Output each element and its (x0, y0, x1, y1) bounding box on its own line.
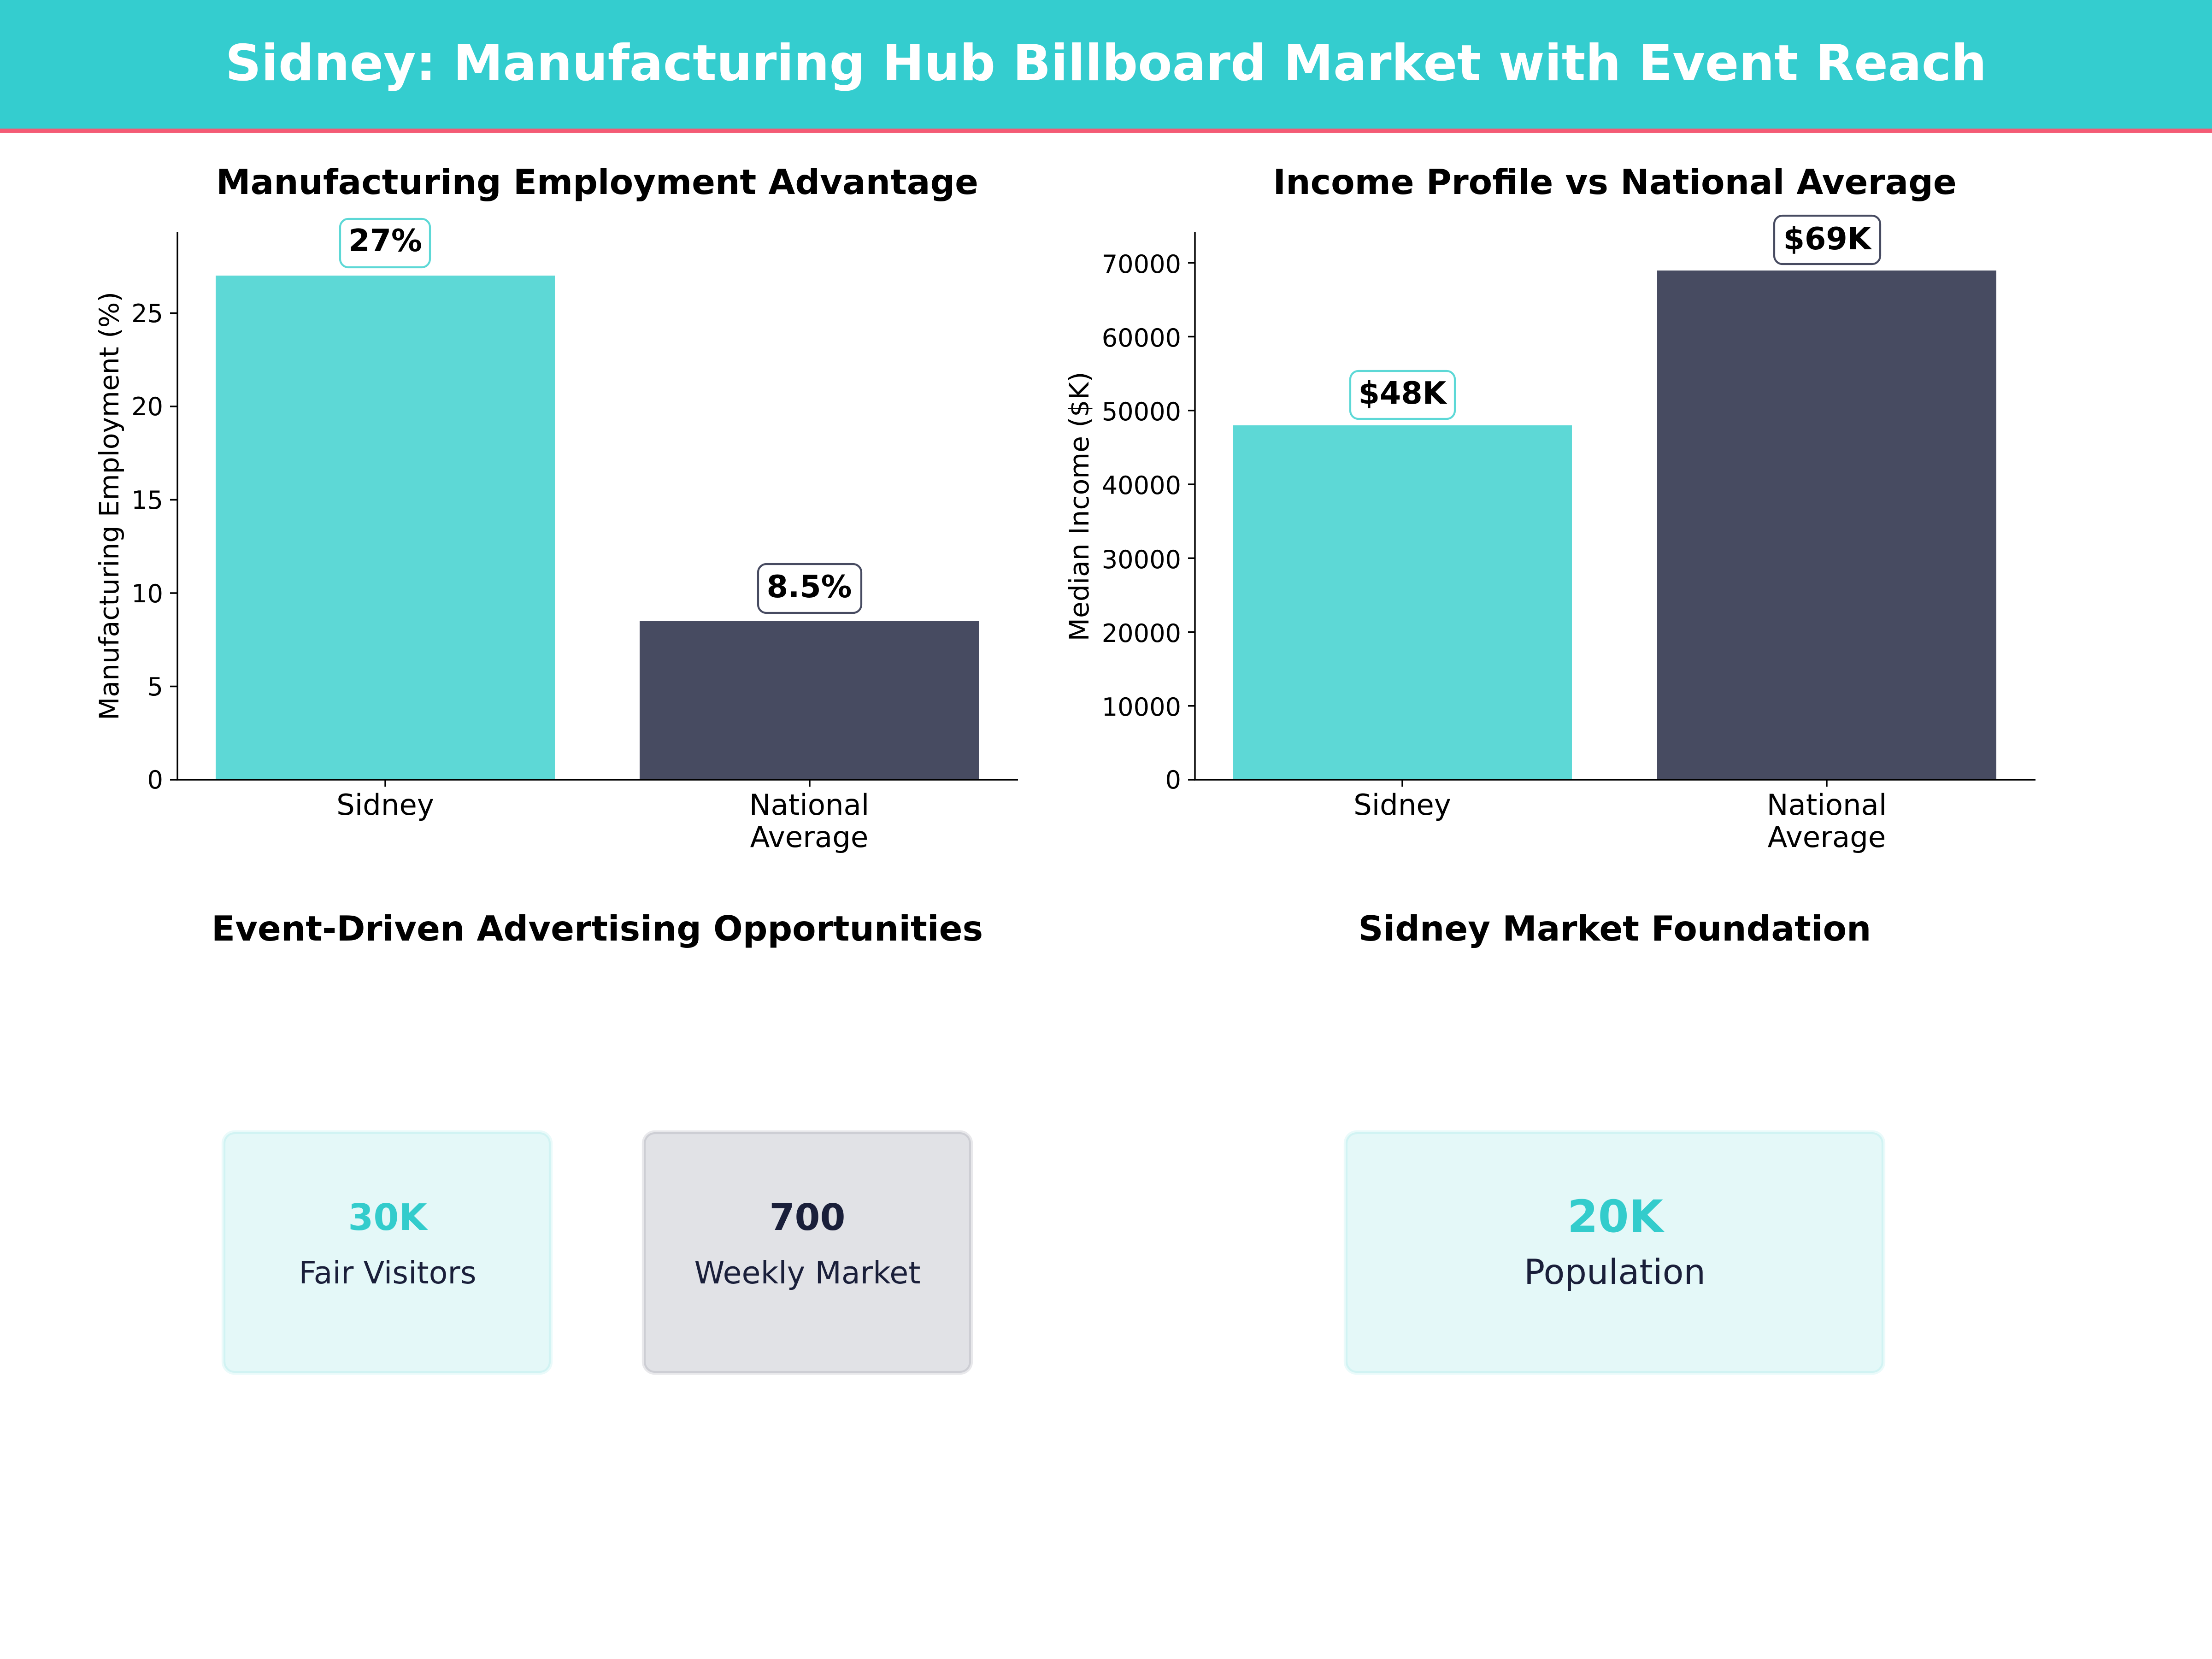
x tick labels: Sidney (1353, 788, 1451, 822)
y tick labels: 0 (1165, 765, 1181, 794)
value label: 8.5% (758, 564, 861, 613)
y tick labels: 20000 (1102, 619, 1181, 648)
y axis label: Median Income ($K) (1064, 372, 1095, 641)
panel: manufacturing employment chart (94, 162, 1018, 854)
axes and ticks (1188, 232, 2036, 787)
bar: National Average 8.5% (640, 621, 979, 780)
x tick labels: National (1767, 788, 1887, 822)
heading: event-driven: Event-Driven Advertising Opportunities (212, 908, 983, 949)
main title: Sidney: Manufacturing Hub Billboard Market with Event Reach (225, 34, 1987, 92)
bar: Sidney $48K (1233, 425, 1572, 780)
card: 30K Fair Visitors: Fair Visitors (299, 1255, 477, 1291)
value label: 8.5%: 8.5% (767, 569, 852, 605)
heading: income profile: Income Profile vs National Average (1273, 162, 1957, 202)
bar: National Average $69K (1657, 271, 1996, 780)
y tick labels: 50000 (1102, 397, 1181, 426)
y tick labels: 0 (147, 765, 163, 794)
value label: 27%: 27% (348, 223, 422, 259)
value label: $69K: $69K (1783, 221, 1872, 257)
x tick labels (1353, 788, 1887, 854)
card: 700 Weekly Market: 700 (770, 1196, 845, 1239)
card: 30K Fair Visitors: 30K (348, 1196, 428, 1239)
x tick labels: Average (750, 820, 868, 854)
card: 20K Population: 20K (1567, 1191, 1665, 1242)
card: 30K Fair Visitors (224, 1132, 551, 1373)
y tick labels: 25 (131, 299, 163, 328)
y tick labels: 10 (131, 579, 163, 608)
panel: event-driven advertising opportunities (212, 908, 983, 1373)
y tick labels: 40000 (1102, 471, 1181, 500)
y tick labels: 5 (147, 672, 163, 701)
y tick labels (1102, 250, 1181, 794)
y tick labels: 15 (131, 486, 163, 515)
y tick labels (131, 299, 163, 794)
axes and ticks (170, 232, 1018, 787)
y tick labels: 70000 (1102, 250, 1181, 279)
header banner (0, 0, 2212, 133)
bar: Sidney 27% (216, 276, 555, 780)
value label: $48K (1350, 371, 1455, 419)
x tick labels: Average (1768, 820, 1886, 854)
heading: manufacturing employment: Manufacturing Employment Advantage (216, 162, 978, 202)
card: 700 Weekly Market: Weekly Market (694, 1255, 920, 1291)
x tick labels: Sidney (336, 788, 434, 822)
x tick labels (336, 788, 869, 854)
card: 20K Population: Population (1524, 1252, 1706, 1292)
y axis label: Manufacturing Employment (%) (94, 292, 125, 720)
heading: market foundation: Sidney Market Foundation (1359, 908, 1871, 949)
card: 700 Weekly Market (644, 1132, 971, 1373)
x tick labels: National (749, 788, 869, 822)
panel: income profile chart (1064, 162, 2036, 854)
y tick labels: 10000 (1102, 693, 1181, 722)
card: 20K Population (1346, 1132, 1883, 1373)
value label: $69K (1774, 216, 1880, 264)
y tick labels: 60000 (1102, 324, 1181, 353)
value label: 27% (340, 219, 430, 267)
value label: $48K: $48K (1359, 375, 1447, 411)
y tick labels: 30000 (1102, 545, 1181, 574)
panel: Sidney market foundation (1346, 908, 1883, 1373)
y tick labels: 20 (131, 392, 163, 421)
